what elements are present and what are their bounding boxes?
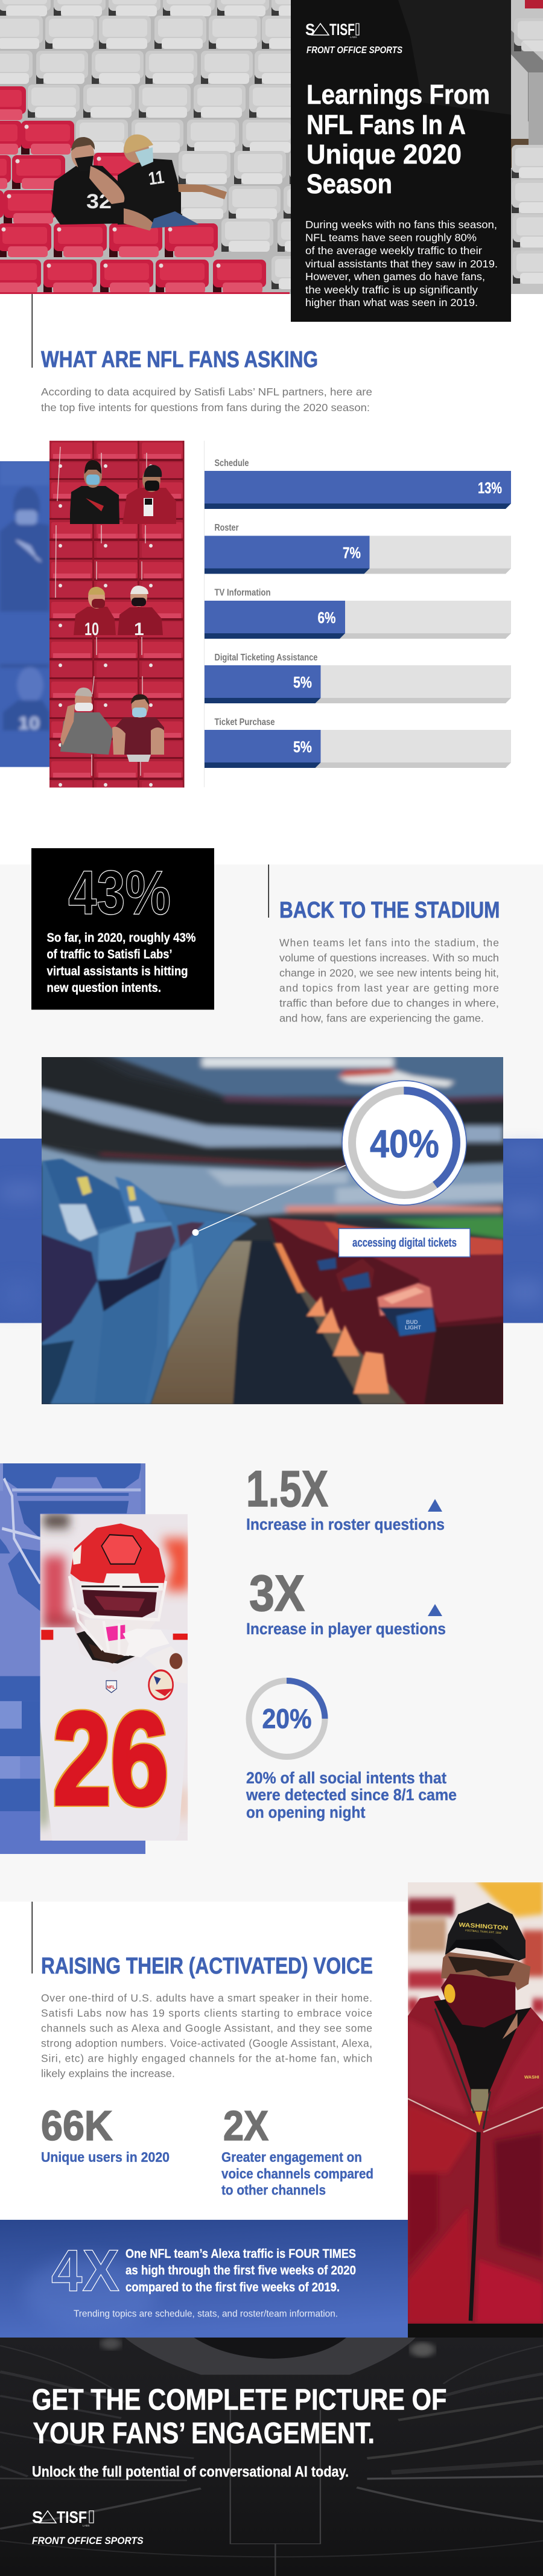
footer heading: YOUR FANS’ ENGAGEMENT. [33,2417,375,2450]
logo: Satisfi Labs footer: S [32,2508,43,2526]
text: social intents: on opening night [246,1803,366,1821]
intro paragraph: of the average weekly traffic to their [305,244,482,257]
hero right strip: stairs [511,0,543,294]
text: social intents [246,1769,457,1821]
blurred stands [36,1053,513,1241]
footer heading [32,2384,446,2450]
logo: Front Office Sports: FRONT OFFICE SPORTS [306,45,402,56]
stat: 1.5X roster questions: 1.5X [246,1460,328,1517]
bar: schedule 13%: Schedule [215,458,249,468]
panel: raising their voice [0,1902,408,2220]
text block: Over one-third of U.S. adults have a smart speaker in their home. [41,1992,372,2004]
donut chart: 40% accessing digital tickets: 40% [370,1122,439,1166]
callout: 43% of traffic: new question intents. [47,981,161,995]
blue tinted photo [0,461,49,767]
stat: 4X outline: 4X [51,2237,119,2304]
cap [445,1903,526,1961]
intro paragraph: During weeks with no fans this season, [305,219,497,231]
stat: 66K unique users: 66K [41,2102,113,2149]
jacket [408,1996,543,2327]
fans row 3 [60,688,164,762]
footer heading: GET THE COMPLETE PICTURE OF [32,2384,446,2417]
title: NFL Fans In A [306,109,466,140]
logo: Satisfi Labs footer: LABS [83,2524,90,2527]
blue seats [42,1159,256,1404]
heading: what are NFL fans asking: WHAT ARE NFL FANS ASKING [41,347,318,372]
scoreboard ring [125,2338,416,2375]
photo: stadium aisle: BUD [406,1319,418,1325]
fans row 2: 1 [134,619,144,639]
jersey number: 26 [53,1686,168,1832]
stat: 2X greater engagement: 2X [223,2102,268,2149]
bar: ticket purchase 5%: Ticket Purchase [215,717,275,727]
text block: back to the stadium [279,936,499,1024]
stat: 66K unique users: Unique users in 2020 [41,2149,170,2165]
logo: Satisfi Labs: S [305,21,315,39]
callout: 4X Alexa traffic [0,2220,408,2338]
fans row 2: 10 [84,619,99,639]
text block: Satisfi Labs now has 19 sports clients starting to embrace voice [41,2007,372,2019]
text block: back to the stadium: When teams let fans into the stadium, the [279,936,499,948]
text block: back to the stadium: and topics from last year are getting more [279,982,499,994]
callout: 4X Alexa traffic: compared to the first five weeks of 2019. [125,2280,340,2294]
stat: 1.5X roster questions [246,1460,445,1533]
callout: 4X Alexa traffic: Trending topics are schedule, stats, and roster/team information. [74,2309,338,2319]
red seats [268,1218,513,1411]
photo: masked Washington fan [408,1879,543,2338]
hero photo: fans in empty seats [0,0,291,294]
cupholder [317,1258,436,1337]
photo: masked Washington fan: FOOTBALL TEAM, EST. 1932 [465,1929,502,1934]
bar: roster 7% [205,523,511,574]
logo: Satisfi Labs footer [32,2508,94,2527]
glove [122,1629,170,1657]
stat: 2X greater engagement [221,2102,373,2197]
text block: channels such as Alexa and Google Assistant, and they see some [41,2022,372,2034]
bar: TV information 6%: TV Information [215,588,270,598]
face [441,1952,530,1990]
bar: TV information 6%: 6% [317,609,335,627]
intro text: top five intents: the top five intents for questions from fans during the 2020 season: [41,401,370,414]
bar: TV information 6% [205,588,511,639]
stat: 1.5X roster questions: Increase in roster questions [246,1515,445,1533]
intro paragraph: virtual assistants that they saw in 2019. [305,258,498,270]
bar: digital ticketing assistance 5%: Digital Ticketing Assistance [215,653,318,663]
photo: football player number 26: NFL [107,1686,115,1690]
donut chart: 20%: 20% [262,1704,311,1734]
callout: 4X Alexa traffic: as high through the first five weeks of 2020 [125,2263,356,2278]
bar: schedule 13% [205,458,511,509]
logo: Front Office Sports footer: FRONT OFFICE SPORTS [32,2535,144,2546]
fans: 32 [86,190,112,213]
logo: Satisfi Labs: TISF [329,21,355,39]
callout: 43% of traffic: virtual assistants is hitting [47,965,188,979]
title [306,79,490,199]
stat: 43% outline: 43% [68,858,171,927]
icon: up triangle [428,1604,442,1616]
stat: 2X greater engagement: to other channels [221,2182,326,2197]
donut chart: 20% [249,1681,325,1757]
stat: 3X player questions: Increase in player questions [246,1620,446,1638]
text: social intents: were detected since 8/1 came [246,1786,457,1804]
collar and zip [434,1998,531,2094]
title: Season [306,168,392,199]
grey stadium seats [0,0,291,289]
logo: Satisfi Labs [305,21,359,39]
text block: back to the stadium: and how, fans are experiencing the game. [279,1012,484,1024]
fans [51,135,227,231]
bar: digital ticketing assistance 5%: 5% [293,673,312,691]
heading: back to the stadium: BACK TO THE STADIUM [279,898,500,923]
text block: back to the stadium: change in 2020, we see new intents being hit, [279,967,499,979]
intro text: top five intents: According to data acquired by Satisfi Labs’ NFL partners, here are [41,386,372,398]
stat: 3X player questions: 3X [249,1565,305,1622]
donut chart: 40% accessing digital tickets [342,1081,466,1205]
blue band behind stadium photo [0,1139,543,1323]
intro paragraph: NFL teams have seen roughly 80% [305,232,477,244]
text: social intents: 20% of all social intents that [246,1769,446,1787]
callout: 43% of traffic [31,848,214,1009]
icon: up triangle [428,1499,442,1512]
jersey [40,1628,188,1841]
text block: Siri, etc) are highly engaged channels for the at-home fan, which [41,2053,372,2065]
stat: 3X player questions [246,1565,446,1638]
text block: back to the stadium: volume of questions increases. With so much [279,951,499,964]
text block: strong adoption numbers. Voice-activated (Google Assistant, Alexa, [41,2037,372,2050]
footer subheading: Unlock the full potential of conversational AI today. [32,2464,349,2481]
text block: back to the stadium: traffic than before due to changes in where, [279,997,499,1009]
hero panel: black title card [291,0,511,322]
bar: roster 7%: 7% [343,543,361,561]
shield [106,1681,116,1693]
photo: masked Washington fan: WASHINGTON [459,1922,508,1932]
bar: digital ticketing assistance 5% [205,653,511,703]
fans row 1 [70,460,176,524]
title: Unique 2020 [306,139,462,170]
bar: ticket purchase 5%: 5% [293,738,312,756]
photo: stadium aisle [36,1053,513,1411]
intro text: top five intents [41,386,372,414]
photo: stadium aisle: LIGHT [405,1325,421,1331]
footer: dark stadium background [0,2338,543,2576]
logo: Satisfi Labs: LABS [350,36,357,39]
fans: 11 [147,167,165,189]
helmet [71,1524,165,1584]
leader line to 40% circle [192,1165,346,1236]
heading: RAISING THEIR (ACTIVATED) VOICE [41,1954,373,1979]
bar: ticket purchase 5% [205,717,511,768]
intro paragraph: higher than what was seen in 2019. [305,296,478,308]
blue tinted player photo [0,1463,145,1855]
photo: masked Washington fan: WASHI [524,2074,539,2080]
visor [83,1590,157,1619]
label: accessing digital tickets: accessing digital tickets [352,1236,457,1250]
face mask [84,1620,157,1656]
stat: 2X greater engagement: voice channels compared [221,2166,373,2182]
aisle [151,1241,407,1404]
intro paragraph: the weekly traffic is up significantly [305,284,478,296]
bar: roster 7%: Roster [215,523,239,533]
stat: 2X greater engagement: Greater engagement on [221,2149,362,2165]
patch [149,1670,173,1699]
photo: masked fans in red seats [49,441,185,788]
text block: likely explains the increase. [41,2068,175,2080]
callout: 4X Alexa traffic: One NFL team’s Alexa traffic is FOUR TIMES [125,2246,356,2261]
callout: 43% of traffic: So far, in 2020, roughly 43% [47,931,196,945]
red stadium seats [0,86,290,294]
bar: schedule 13%: 13% [478,479,502,497]
bar chart: top five intents [205,458,511,768]
collar [77,1631,139,1664]
fans row 2 [74,586,163,639]
label: accessing digital tickets [339,1229,470,1257]
photo: football player number 26 [40,1514,189,1841]
intro paragraph: However, when games do have fans, [305,270,485,283]
title: Learnings From [306,79,490,110]
text block [41,1992,372,2080]
blue tinted photo: 10 [18,714,40,733]
logo: Satisfi Labs footer: TISF [57,2508,87,2526]
stat: 66K unique users [41,2102,170,2165]
intro paragraph [305,219,498,308]
callout: 43% of traffic: of traffic to Satisfi Labs’ [47,948,173,961]
